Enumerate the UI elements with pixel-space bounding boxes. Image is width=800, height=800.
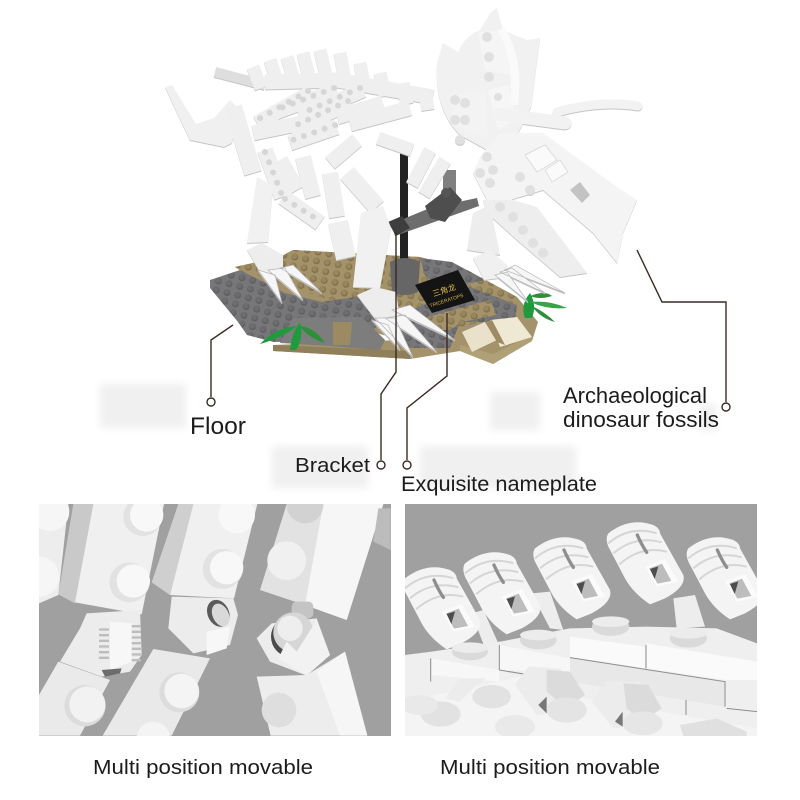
panel: joint close-up — [39, 504, 391, 736]
green plants — [260, 293, 567, 350]
front leg and foot — [353, 206, 455, 357]
label: Floor: Floor — [190, 413, 246, 440]
gear joint one — [60, 610, 142, 677]
panel: stud and socket close-up — [405, 504, 757, 736]
tilted cylinder studs — [403, 522, 764, 649]
upper brick three — [260, 487, 391, 620]
front clips and bricks — [402, 667, 757, 738]
upper brick one — [58, 497, 164, 614]
left brick sliver — [19, 492, 69, 603]
nameplate — [415, 270, 475, 313]
rib studs — [257, 88, 360, 221]
right leg and foot — [467, 205, 565, 302]
support bracket — [388, 153, 479, 295]
label: Archaeological dinosaur fossils: dinosaur fossils — [563, 407, 719, 432]
label: Archaeological dinosaur fossils — [563, 383, 719, 432]
gear joint two — [168, 596, 238, 655]
spine and ribs — [215, 50, 445, 223]
white skeleton — [165, 8, 638, 357]
nameplate: 三角龙 — [431, 282, 457, 299]
snout and jaw — [473, 133, 637, 277]
lower brick mass — [405, 627, 757, 736]
stud tops — [452, 616, 707, 660]
lower brick three — [257, 652, 367, 736]
label: Archaeological dinosaur fossils: Archaeological — [563, 383, 707, 408]
rear leg and foot — [247, 177, 322, 303]
lower brick two — [103, 649, 210, 755]
caption: right panel: Multi position movable — [440, 757, 660, 779]
lower brick one — [39, 662, 110, 736]
ball joint three — [257, 602, 330, 676]
blurred retouch patches behind the labels — [100, 384, 716, 488]
product model: triceratops skeleton on base — [165, 8, 638, 364]
nameplate: TRICERATOPS — [429, 293, 465, 309]
tail — [165, 85, 240, 147]
leader line: floor — [207, 325, 233, 406]
middle leg — [330, 173, 377, 258]
horns — [497, 104, 638, 123]
leader line: nameplate — [403, 313, 447, 469]
caption: left panel: Multi position movable — [93, 757, 313, 779]
leader line: bracket — [377, 232, 396, 469]
label: Exquisite nameplate: Exquisite nameplate — [401, 473, 597, 496]
back hinges — [472, 592, 705, 648]
base plate — [210, 250, 538, 364]
upper brick two — [152, 497, 257, 598]
leader line: fossils — [637, 250, 730, 411]
label: Bracket: Bracket — [295, 455, 370, 477]
head frill — [437, 8, 540, 160]
